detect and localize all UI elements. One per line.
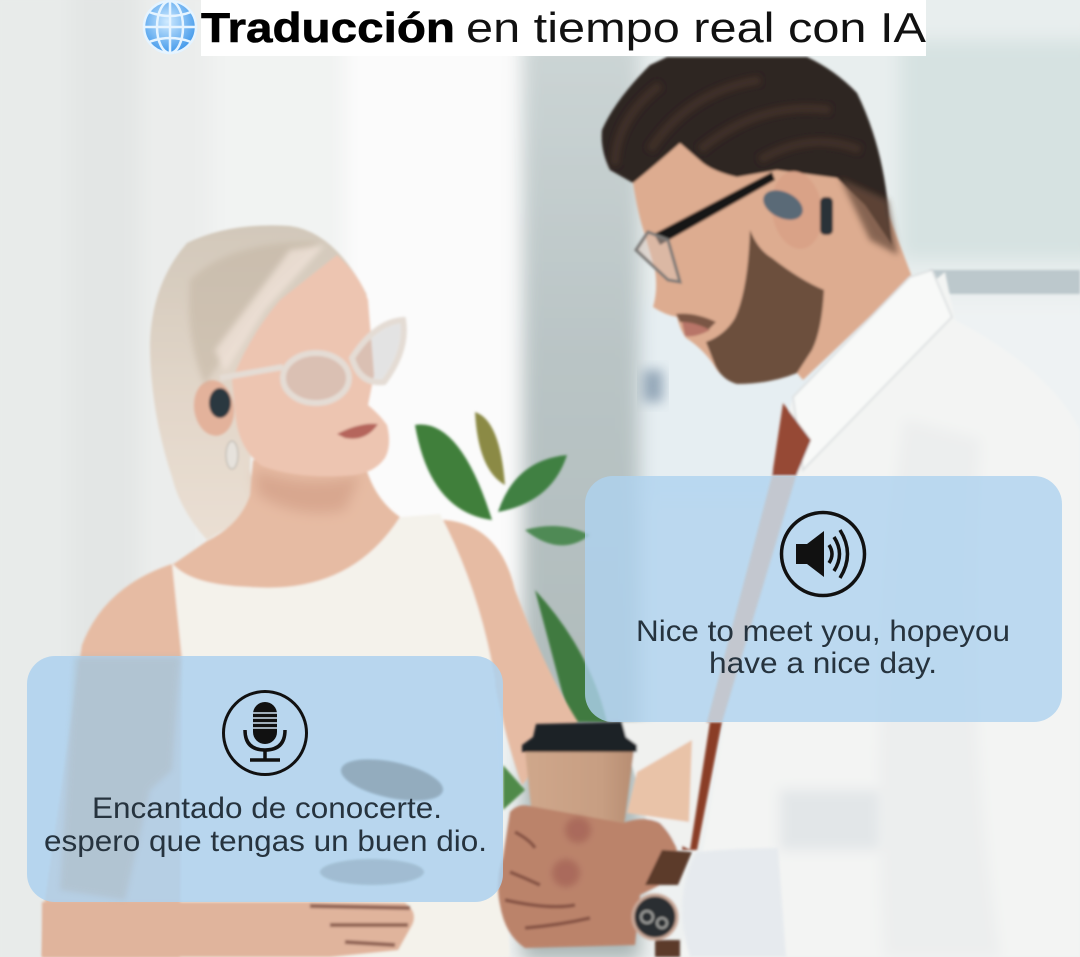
woman: hair back — [150, 225, 367, 540]
paper sleeve — [627, 740, 692, 822]
woman: white top — [172, 514, 510, 957]
icon: microphone — [224, 692, 306, 774]
woman: earbud — [209, 388, 231, 418]
woman: lips — [337, 424, 378, 439]
cup lid — [522, 722, 637, 752]
coffee cup and hands — [42, 722, 786, 957]
woman: forearm and hands — [42, 902, 414, 957]
man: hands — [498, 805, 677, 948]
woman: face — [232, 255, 389, 476]
man: tie lower — [682, 722, 722, 850]
woman's arm ghost — [60, 657, 180, 900]
panel: english speech — [585, 476, 1062, 722]
cup body — [525, 750, 634, 825]
man: nape stubble — [840, 178, 898, 255]
icon: speaker — [782, 512, 864, 596]
text: english phrase — [636, 615, 1010, 680]
text: english phrase: have a nice day. — [709, 647, 937, 680]
title text: Traducción — [201, 4, 455, 51]
woman: shoulders and arm — [42, 460, 578, 957]
white gap behind cup — [620, 722, 710, 850]
panel: spanish speech — [27, 656, 503, 902]
text: spanish phrase: espero que tengas un buen dio. — [44, 825, 487, 858]
man: earbud — [758, 184, 833, 235]
text: spanish phrase — [44, 792, 487, 858]
man: shirt — [680, 272, 1080, 957]
man: beard — [706, 230, 824, 384]
text: english phrase: Nice to meet you, hopeyou — [636, 615, 1010, 648]
man: cuff — [682, 848, 786, 957]
tie ghost — [707, 476, 796, 722]
man: glasses — [636, 172, 775, 282]
man: hair — [602, 57, 892, 245]
title — [143, 0, 926, 56]
woman: neck shadow — [255, 470, 360, 513]
man: collar — [793, 270, 952, 470]
man: tie knot — [772, 403, 811, 476]
woman: earring — [226, 441, 238, 469]
title: en tiempo real con IA — [466, 4, 926, 51]
earbud case ghost — [320, 752, 447, 885]
man: lips — [682, 322, 710, 336]
icon: globe — [143, 0, 197, 54]
woman — [42, 225, 578, 957]
watch — [633, 850, 692, 957]
man: ear — [767, 168, 827, 252]
text: spanish phrase: Encantado de conocerte. — [92, 792, 442, 825]
man: face and neck — [633, 125, 912, 384]
man — [602, 57, 1080, 957]
woman: hair front strands — [189, 242, 320, 385]
woman: glasses — [220, 320, 404, 403]
plant — [415, 412, 607, 810]
